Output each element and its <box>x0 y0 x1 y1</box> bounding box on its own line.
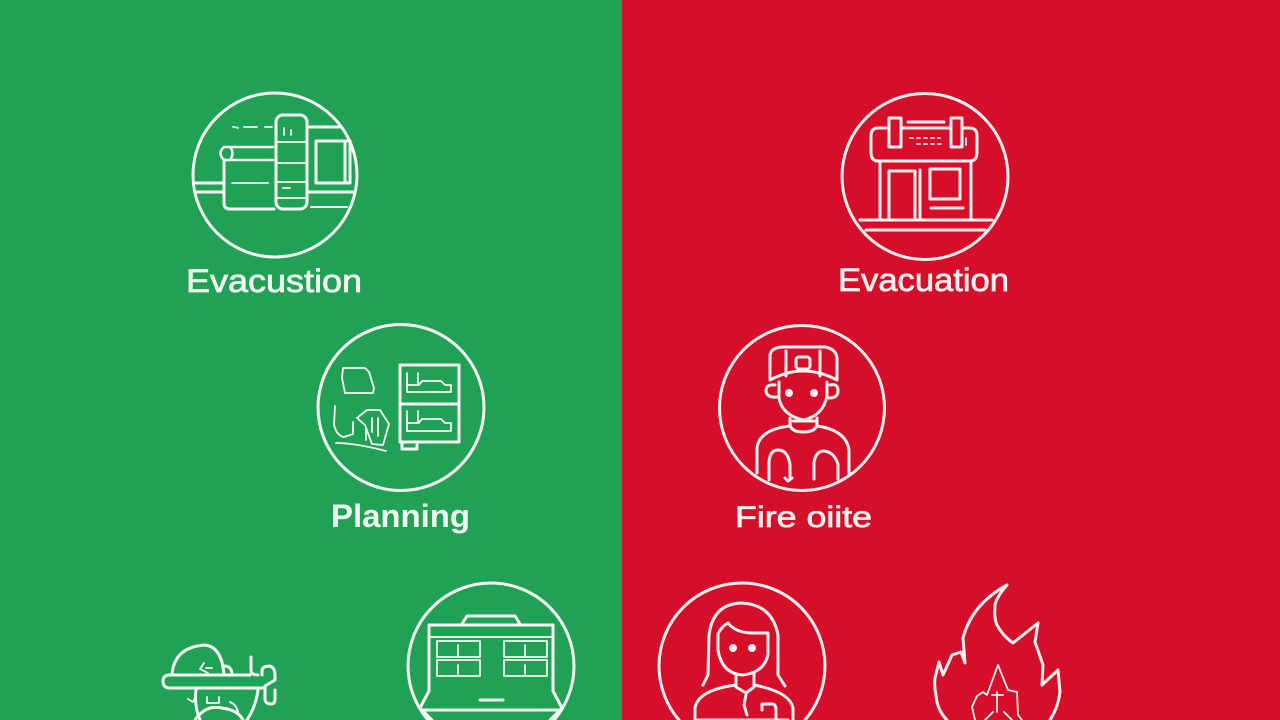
icon: helmet and tools, green <box>163 645 275 720</box>
icon: planning documents and cabinet, green <box>318 324 484 490</box>
icon: woman, red <box>659 583 825 720</box>
panel: red background <box>622 0 1280 720</box>
icon: evacuation storefront, red <box>842 94 1008 260</box>
icon: flame, red <box>935 585 1060 720</box>
panel: green background <box>0 0 622 720</box>
icon: evacuation building and scroll, green <box>193 93 357 257</box>
label: Planning: Planning <box>331 498 470 534</box>
label: Evacuation red: Evacuation <box>838 262 1009 298</box>
label: Evacustion green: Evacustion <box>186 263 362 299</box>
icon: firefighter person, red <box>720 326 884 490</box>
icon: laptop, green <box>408 583 574 720</box>
label: Fire oiite: Fire oiite <box>735 501 872 534</box>
